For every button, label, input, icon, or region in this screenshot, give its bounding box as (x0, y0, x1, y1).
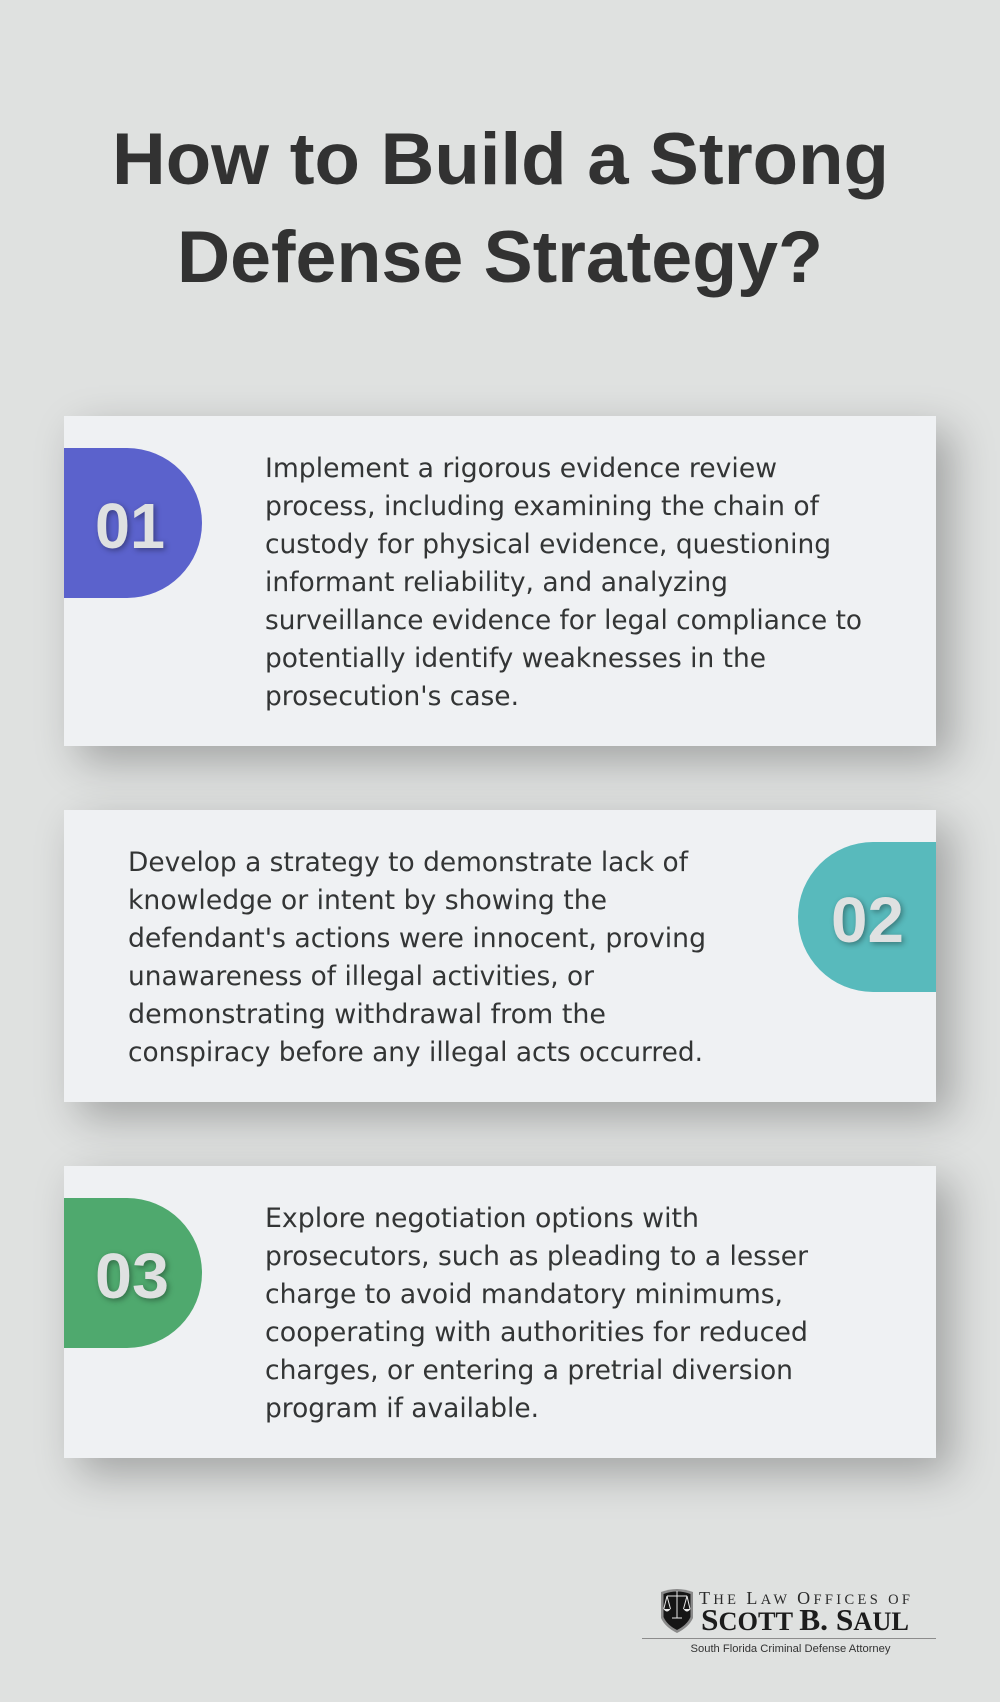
text: the law offices of: THE LAW OFFICES OF (699, 1588, 910, 1608)
text: tagline: South Florida Criminal Defense Attorney (690, 1643, 891, 1655)
text: step 02 description: unawareness of illegal activities, or (128, 961, 594, 992)
badge: 02: 02 (831, 884, 904, 956)
text: scott b. saul: SCOTT B. SAUL (701, 1602, 909, 1637)
text: step 01 description: process, including examining the chain of (265, 491, 820, 522)
icon: shield with scales (661, 1589, 693, 1633)
text: step 01 description (265, 453, 862, 712)
text: step 02 description: defendant's actions were innocent, proving (128, 923, 706, 954)
text: step 03 description (265, 1203, 808, 1424)
text: step 02 description (128, 847, 706, 1068)
text: step 02 description: knowledge or intent by showing the (128, 885, 607, 916)
panel: step 01 (64, 416, 936, 746)
text: step 01 description: custody for physical evidence, questioning (265, 529, 831, 560)
text: step 01 description: surveillance evidence for legal compliance to (265, 605, 862, 636)
badge: 03: 03 (95, 1240, 169, 1312)
title: How to Build a Strong (112, 119, 889, 200)
title: Defense Strategy? (177, 217, 823, 298)
text: step 03 description: prosecutors, such as pleading to a lesser (265, 1241, 808, 1272)
text: step 01 description: Implement a rigorous evidence review (265, 453, 777, 484)
panel: step 02 (64, 810, 936, 1102)
badge: 01: 01 (95, 490, 165, 562)
text: step 01 description: potentially identify weaknesses in the (265, 643, 766, 674)
text: step 03 description: program if available. (265, 1393, 539, 1424)
panel: step 03 (64, 1166, 936, 1458)
text: step 01 description: informant reliability, and analyzing (265, 567, 728, 598)
text: step 02 description: Develop a strategy to demonstrate lack of (128, 847, 689, 878)
text: step 01 description: prosecution's case. (265, 681, 519, 712)
text: step 02 description: conspiracy before any illegal acts occurred. (128, 1037, 703, 1068)
text: step 02 description: demonstrating withdrawal from the (128, 999, 606, 1030)
title (112, 119, 889, 298)
text: step 03 description: cooperating with authorities for reduced (265, 1317, 808, 1348)
badge: 03 (64, 1198, 202, 1348)
badge: 01 (64, 448, 202, 598)
badge: 02 (798, 842, 936, 992)
text: step 03 description: charge to avoid mandatory minimums, (265, 1279, 783, 1310)
text: step 03 description: Explore negotiation options with (265, 1203, 699, 1234)
text: step 03 description: charges, or entering a pretrial diversion (265, 1355, 793, 1386)
